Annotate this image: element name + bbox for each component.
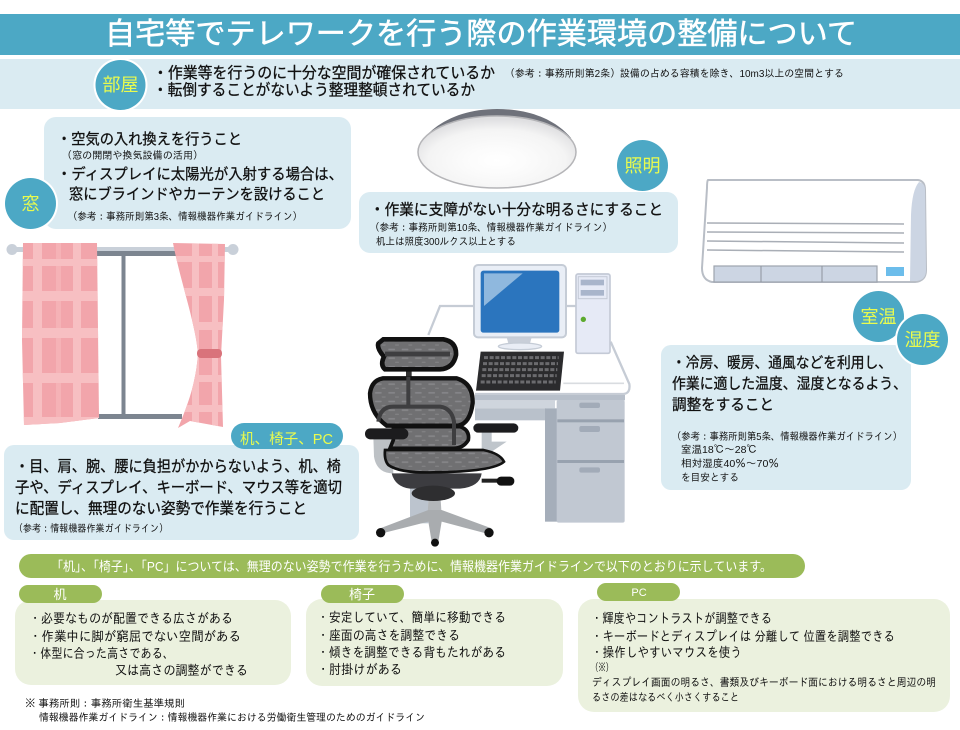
- panel: desk, chair and PC: [4, 445, 359, 540]
- chair list: ・肘掛けがある: [317, 662, 402, 677]
- panel: desk requirements: [15, 585, 291, 685]
- desk list: 又は高さの調整ができる: [115, 663, 248, 678]
- chair list: [317, 610, 506, 677]
- desk list: ・作業中に脚が窮屈でない空間がある: [29, 629, 241, 644]
- room text block: ・作業等を行うのに十分な空間が確保されているか: [153, 64, 495, 82]
- ergonomics text block: [15, 458, 342, 518]
- icon: humidity badge: [895, 312, 950, 367]
- icon: humidity badge: 湿度: [904, 330, 940, 350]
- chair: [365, 339, 518, 547]
- guideline banner: [19, 554, 805, 578]
- ergonomics text block: 子や、ディスプレイ、キーボード、マウス等を適切: [15, 478, 342, 496]
- icon: room badge: [94, 58, 148, 112]
- lighting heading: ・作業に支障がない十分な明るさにすること: [370, 202, 663, 218]
- title banner: [0, 14, 960, 55]
- desk list: ・必要なものが配置できる広さがある: [29, 611, 233, 626]
- lighting note: 机上は照度300ルクス以上とする: [376, 236, 516, 248]
- icon: window badge: 窓: [22, 194, 40, 214]
- footnote: 情報機器作業ガイドライン：情報機器作業における労働衛生管理のためのガイドライン: [39, 711, 425, 724]
- PC list: ・操作しやすいマウスを使う: [591, 645, 742, 660]
- desk list: ・体型に合った高さである、: [29, 646, 174, 661]
- footnote: ※ 事務所則：事務所衛生基準規則: [25, 697, 185, 710]
- ergonomics reference: （参考：情報機器作業ガイドライン）: [14, 523, 168, 535]
- temperature reference: [672, 431, 902, 484]
- illustration: air conditioner: [702, 180, 926, 282]
- PC note: （※）: [591, 662, 613, 674]
- room reference note: （参考：事務所則第2条）設備の占める容積を除き、10m3以上の空間とする: [505, 68, 844, 80]
- icon: lighting badge: [617, 140, 668, 191]
- curtain tie: [197, 349, 222, 358]
- window text block: ・ディスプレイに太陽光が入射する場合は、: [57, 165, 343, 183]
- desk: [412, 306, 630, 523]
- temperature text block: [672, 354, 907, 414]
- left curtain: [22, 243, 99, 425]
- temperature reference: 相対湿度40％～70％: [681, 458, 779, 470]
- ergonomics text block: に配置し、無理のない姿勢で作業を行うこと: [15, 500, 307, 518]
- temperature reference: （参考：事務所則第5条、情報機器作業ガイドライン）: [672, 431, 902, 443]
- icon: lighting badge: 照明: [624, 156, 660, 176]
- desk pill: [19, 585, 102, 603]
- monitor: [474, 265, 566, 350]
- chair list: ・座面の高さを調整できる: [317, 628, 460, 643]
- chair list: ・安定していて、簡単に移動できる: [317, 610, 506, 625]
- panel: PC requirements: [578, 583, 950, 712]
- PC note: るさの差はなるべく小さくすること: [592, 691, 739, 704]
- illustration: desk, computer and chair: [365, 265, 630, 547]
- illustration: window and curtains: [6, 240, 238, 430]
- guideline banner: 「机」、「椅子」、「PC」については、無理のない姿勢で作業を行うために、情報機器作業ガイドラインで以下のとおりに示しています。: [51, 559, 772, 574]
- room text block: [153, 64, 495, 99]
- keyboard: [476, 352, 564, 391]
- panel: room: [0, 58, 960, 112]
- temperature text block: 作業に適した温度、湿度となるよう、: [672, 376, 907, 392]
- icon: temperature badge: [853, 291, 904, 342]
- window text block: [57, 131, 343, 203]
- PC list: ・輝度やコントラストが調整できる: [591, 611, 772, 626]
- icon: room badge: 部屋: [102, 75, 138, 95]
- title: 自宅等でテレワークを行う際の作業環境の整備について: [105, 18, 857, 51]
- window note: （窓の開閉や換気設備の活用）: [62, 150, 203, 162]
- desk list: [29, 611, 248, 678]
- chair pill: 椅子: [349, 587, 375, 602]
- room text block: ・転倒することがないよう整理整頓されているか: [153, 81, 475, 99]
- temperature reference: を目安とする: [681, 472, 739, 484]
- PC list: [591, 611, 895, 660]
- indicator: [886, 267, 904, 276]
- window reference: （参考：事務所則第3条、情報機器作業ガイドライン）: [68, 211, 302, 223]
- temperature text block: 調整をすること: [672, 396, 774, 414]
- PC pill: PC: [631, 587, 647, 599]
- panel: chair requirements: [306, 585, 563, 686]
- desk pill: 机: [53, 587, 67, 602]
- right curtain: [173, 243, 225, 428]
- PC note: [591, 662, 936, 704]
- temperature text block: ・冷房、暖房、通風などを利用し、: [672, 354, 892, 372]
- icon: window badge: [3, 176, 58, 231]
- label: desk, chair, PC: [231, 423, 343, 449]
- ergonomics text block: ・目、肩、腕、腰に負担がかからないよう、机、椅: [15, 458, 341, 476]
- footnote: [25, 697, 425, 724]
- PC pill: [597, 583, 680, 601]
- panel: temperature and humidity: [661, 345, 911, 490]
- icon: temperature badge: 室温: [860, 307, 896, 327]
- temperature reference: 室温18℃～28℃: [681, 444, 757, 456]
- panel: window: [44, 117, 351, 229]
- window text block: 窓にブラインドやカーテンを設けること: [69, 185, 325, 203]
- chair list: ・傾きを調整できる背もたれがある: [317, 645, 506, 660]
- label: desk, chair, PC: 机、椅子、PC: [240, 431, 333, 448]
- computer tower: [576, 274, 610, 353]
- chair pill: [321, 585, 404, 603]
- lighting reference: （参考：事務所則第10条、情報機器作業ガイドライン）: [370, 222, 612, 234]
- PC list: ・キーボードとディスプレイは 分離して 位置を調整できる: [591, 629, 895, 644]
- window text block: ・空気の入れ換えを行うこと: [57, 131, 242, 148]
- illustration: ceiling light: [418, 109, 576, 188]
- panel: lighting: [359, 192, 678, 253]
